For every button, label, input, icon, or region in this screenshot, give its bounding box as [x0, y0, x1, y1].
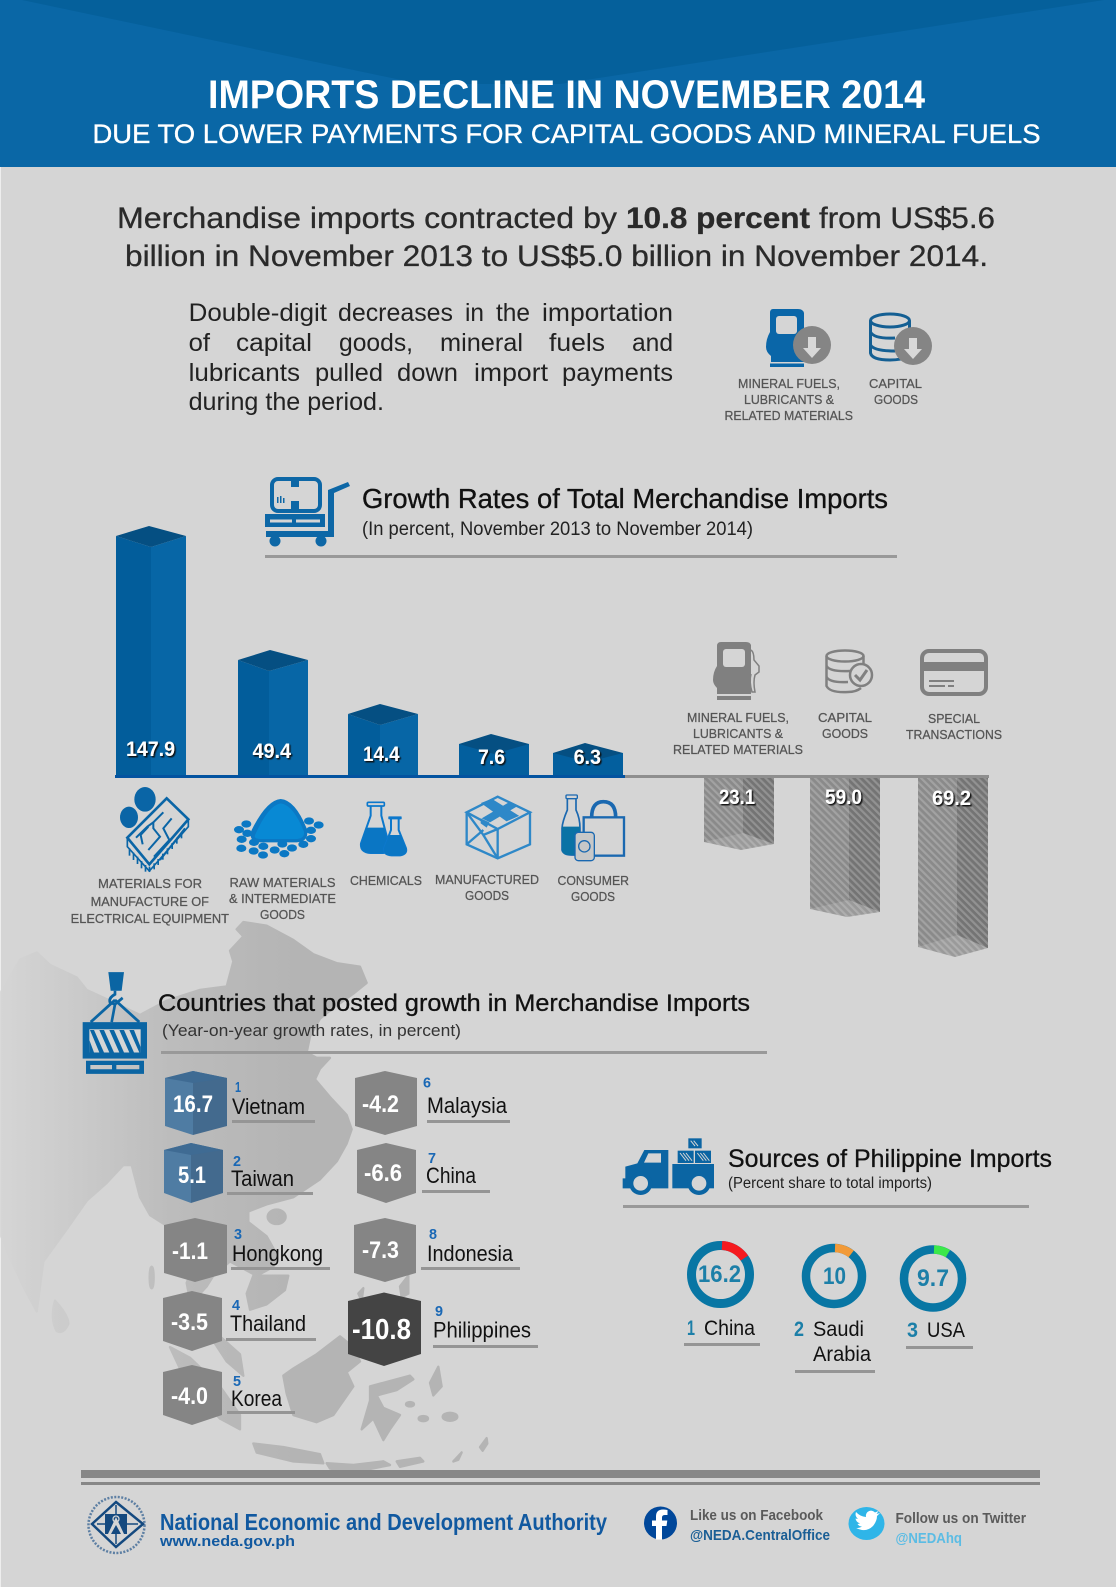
paragraph: double-digit decreases: capital — [236, 329, 312, 357]
lead statement: from US$5.6 — [819, 202, 995, 235]
organisation name: National Economic and Development Authority — [160, 1509, 607, 1535]
icon: fuel pump with down arrow — [766, 309, 831, 367]
country: 3 Hongkong — [164, 1218, 330, 1282]
category labels (positive): & INTERMEDIATE — [229, 892, 336, 906]
heading: countries — [158, 990, 750, 1040]
icon: Twitter — [848, 1507, 884, 1540]
bar: 69.2: 69.2 — [932, 787, 971, 810]
country: 6 Malaysia: Malaysia — [427, 1093, 508, 1118]
bar: 147.9: 147.9 — [126, 738, 175, 761]
logo: NEDA seal — [88, 1497, 144, 1553]
paragraph: double-digit decreases: and — [632, 329, 673, 357]
facebook text: Like us on Facebook — [690, 1507, 824, 1524]
country: 8 Indonesia — [354, 1218, 520, 1282]
paragraph: double-digit decreases: in — [465, 299, 484, 327]
facebook text — [690, 1507, 830, 1544]
source: 1 China: 16.2 — [698, 1261, 741, 1288]
country: 2 Taiwan — [164, 1143, 313, 1203]
sub-heading: (Percent share to total imports) — [728, 1175, 932, 1192]
paragraph: double-digit decreases: fuels — [549, 329, 605, 357]
country: 7 China: -6.6 — [364, 1160, 402, 1187]
category labels (negative): RELATED MATERIALS — [673, 743, 803, 757]
source: 1 China: 1 — [687, 1317, 695, 1340]
icon: database with down arrow — [870, 314, 932, 365]
paragraph: double-digit decreases: the — [496, 299, 530, 327]
paragraph: double-digit decreases — [189, 299, 673, 416]
bar: 49.4: 49.4 — [252, 740, 291, 763]
icon: chemical flasks — [361, 802, 406, 855]
bar: 23.1: 23.1 — [719, 786, 755, 809]
subtitle: DUE TO LOWER PAYMENTS FOR CAPITAL GOODS AND MINERAL FUELS — [92, 119, 1040, 149]
labels: mineral fuels and capital goods (top) — [724, 377, 922, 423]
country: 7 China — [357, 1143, 490, 1203]
category labels (positive): CONSUMER — [558, 874, 629, 888]
source: 2 Saudi Arabia: Arabia — [813, 1343, 871, 1366]
country: 4 Thailand: 4 — [232, 1297, 241, 1314]
bar: 49.4 — [238, 650, 308, 775]
country: 4 Thailand — [163, 1291, 316, 1351]
category labels (positive): GOODS — [571, 890, 615, 904]
category labels (negative): TRANSACTIONS — [906, 728, 1002, 742]
paragraph: double-digit decreases: decreases — [338, 299, 453, 327]
source: 3 USA — [904, 1250, 973, 1349]
heading: growth rates: Growth Rates of Total Merchandise Imports — [362, 483, 888, 514]
country: 5 Korea: Korea — [231, 1386, 283, 1411]
heading: growth rates — [362, 483, 888, 540]
bar: 6.3: 6.3 — [574, 746, 601, 769]
paragraph: double-digit decreases: pulled — [315, 359, 383, 387]
icon: crane with container — [83, 972, 147, 1074]
country: 9 Philippines: 9 — [435, 1303, 443, 1320]
heading: sources — [728, 1145, 1052, 1192]
country: 2 Taiwan: 2 — [233, 1153, 241, 1170]
labels: mineral fuels and capital goods (top): RELATED MATERIALS — [724, 409, 853, 423]
facebook text: @NEDA.CentralOffice — [690, 1527, 830, 1544]
bar: 59.0 — [810, 778, 880, 917]
lead statement: 10.8 percent — [626, 202, 810, 235]
source: 2 Saudi Arabia: 2 — [794, 1318, 804, 1341]
icon: cart with scale — [265, 477, 350, 546]
heading: countries: Countries that posted growth in Merchandise Imports — [158, 990, 750, 1017]
labels: mineral fuels and capital goods (top): GOODS — [874, 393, 918, 407]
bar: 14.4: 14.4 — [363, 743, 400, 766]
paragraph: double-digit decreases: Double-digit — [189, 299, 327, 327]
category labels (negative): SPECIAL — [928, 712, 980, 726]
bar: 59.0: 59.0 — [825, 786, 862, 809]
country: 3 Hongkong: Hongkong — [232, 1241, 323, 1266]
country: 9 Philippines — [348, 1292, 538, 1366]
icon: consumer goods — [562, 795, 624, 861]
country: 8 Indonesia: -7.3 — [362, 1237, 399, 1264]
country: 2 Taiwan: 5.1 — [178, 1162, 206, 1189]
organisation name — [159, 1509, 607, 1550]
sub-heading: (In percent, November 2013 to November 2014) — [362, 519, 753, 540]
icon: database grey — [826, 650, 872, 692]
bar: 6.3 — [553, 743, 623, 775]
country: 3 Hongkong: 3 — [234, 1226, 242, 1243]
category labels (positive): CHEMICALS — [350, 874, 422, 888]
source: 3 USA: 3 — [907, 1319, 918, 1342]
bar: 7.6: 7.6 — [478, 746, 505, 769]
paragraph: double-digit decreases: lubricants — [189, 359, 300, 387]
country: 5 Korea: -4.0 — [171, 1383, 208, 1410]
sub-heading: (Year-on-year growth rates, in percent) — [162, 1021, 461, 1040]
country: 9 Philippines: -10.8 — [352, 1314, 411, 1346]
category labels (negative): GOODS — [822, 727, 868, 741]
category labels (positive): MANUFACTURED — [435, 873, 539, 887]
icon: circuit chip — [120, 787, 188, 872]
labels: mineral fuels and capital goods (top): MINERAL FUELS, — [738, 377, 840, 391]
category labels (positive): MANUFACTURE OF — [91, 895, 209, 909]
country: 1 Vietnam: 1 — [235, 1079, 241, 1096]
icon: delivery truck — [623, 1138, 714, 1195]
paragraph: double-digit decreases: payments — [562, 359, 673, 387]
header banner — [0, 0, 1116, 167]
paragraph: double-digit decreases: goods, — [339, 329, 413, 357]
category labels (positive): ELECTRICAL EQUIPMENT — [71, 912, 229, 926]
title: IMPORTS DECLINE IN NOVEMBER 2014 — [208, 73, 926, 117]
category labels (positive): MATERIALS FOR — [98, 877, 202, 891]
bar chart: positive growth — [116, 526, 623, 775]
icon: package box — [467, 797, 530, 858]
bar: 14.4 — [348, 704, 418, 775]
category labels (positive): GOODS — [260, 908, 305, 922]
paragraph: double-digit decreases: down — [397, 359, 458, 387]
labels: mineral fuels and capital goods (top): CAPITAL — [869, 377, 922, 391]
category labels (positive): RAW MATERIALS — [230, 876, 336, 890]
lead statement: Merchandise imports contracted by — [117, 202, 617, 235]
country: 7 China: 7 — [428, 1150, 436, 1167]
twitter text: Follow us on Twitter — [896, 1510, 1026, 1527]
source: 1 China: China — [704, 1317, 755, 1340]
twitter text — [896, 1510, 1026, 1547]
category labels (negative) — [673, 711, 1002, 757]
bar: 147.9 — [116, 526, 186, 775]
icon: powder mound — [234, 799, 324, 859]
category labels (positive): GOODS — [465, 889, 509, 903]
source: 3 USA: 9.7 — [917, 1265, 949, 1292]
source: 1 China — [684, 1246, 760, 1346]
bar: 69.2 — [918, 778, 988, 957]
category labels (positive) — [71, 873, 629, 926]
paragraph: double-digit decreases: of — [189, 329, 210, 357]
heading: sources: Sources of Philippine Imports — [728, 1145, 1052, 1173]
country: 1 Vietnam: Vietnam — [232, 1094, 305, 1119]
icon: fuel pump grey — [713, 642, 759, 700]
twitter text: @NEDAhq — [896, 1530, 962, 1547]
category labels (negative): LUBRICANTS & — [693, 727, 784, 741]
lead statement — [117, 202, 995, 273]
category labels (negative): MINERAL FUELS, — [687, 711, 789, 725]
country: 5 Korea: 5 — [233, 1373, 241, 1390]
paragraph: double-digit decreases: during the period. — [189, 388, 384, 416]
country: 6 Malaysia: 6 — [423, 1074, 431, 1092]
paragraph: double-digit decreases: import — [474, 359, 548, 387]
icon: credit card — [922, 651, 986, 694]
paragraph: double-digit decreases: importation — [542, 299, 673, 327]
country: 2 Taiwan: Taiwan — [231, 1166, 294, 1191]
labels: mineral fuels and capital goods (top): LUBRICANTS & — [744, 393, 835, 407]
source: 2 Saudi Arabia — [794, 1248, 875, 1373]
paragraph: double-digit decreases: mineral — [440, 329, 523, 357]
country: 4 Thailand: Thailand — [230, 1311, 306, 1336]
country: 8 Indonesia: Indonesia — [427, 1241, 514, 1266]
country: 3 Hongkong: -1.1 — [172, 1238, 208, 1265]
country: 5 Korea — [163, 1365, 295, 1425]
country: 6 Malaysia: -4.2 — [362, 1091, 399, 1118]
country: 7 China: China — [426, 1163, 477, 1188]
category labels (negative): CAPITAL — [818, 711, 872, 725]
icon: Facebook — [644, 1506, 677, 1540]
country: 1 Vietnam — [165, 1071, 315, 1135]
country: 4 Thailand: -3.5 — [171, 1309, 208, 1336]
country ranking list — [163, 1071, 538, 1425]
lead statement: billion in November 2013 to US$5.0 billion in November 2014. — [125, 240, 988, 273]
organisation name: www.neda.gov.ph — [159, 1533, 295, 1550]
country: 9 Philippines: Philippines — [433, 1318, 531, 1342]
map: Southeast Asia background — [1, 922, 487, 1472]
country: 1 Vietnam: 16.7 — [173, 1091, 213, 1118]
source: 2 Saudi Arabia: 10 — [823, 1263, 846, 1290]
country: 6 Malaysia — [355, 1071, 510, 1135]
bar: 23.1 — [704, 778, 774, 850]
bar: 7.6 — [459, 734, 529, 775]
bar chart: negative growth — [704, 778, 988, 957]
country: 8 Indonesia: 8 — [429, 1226, 437, 1243]
source: 3 USA: USA — [927, 1319, 965, 1342]
source: 2 Saudi Arabia: Saudi — [813, 1318, 864, 1341]
